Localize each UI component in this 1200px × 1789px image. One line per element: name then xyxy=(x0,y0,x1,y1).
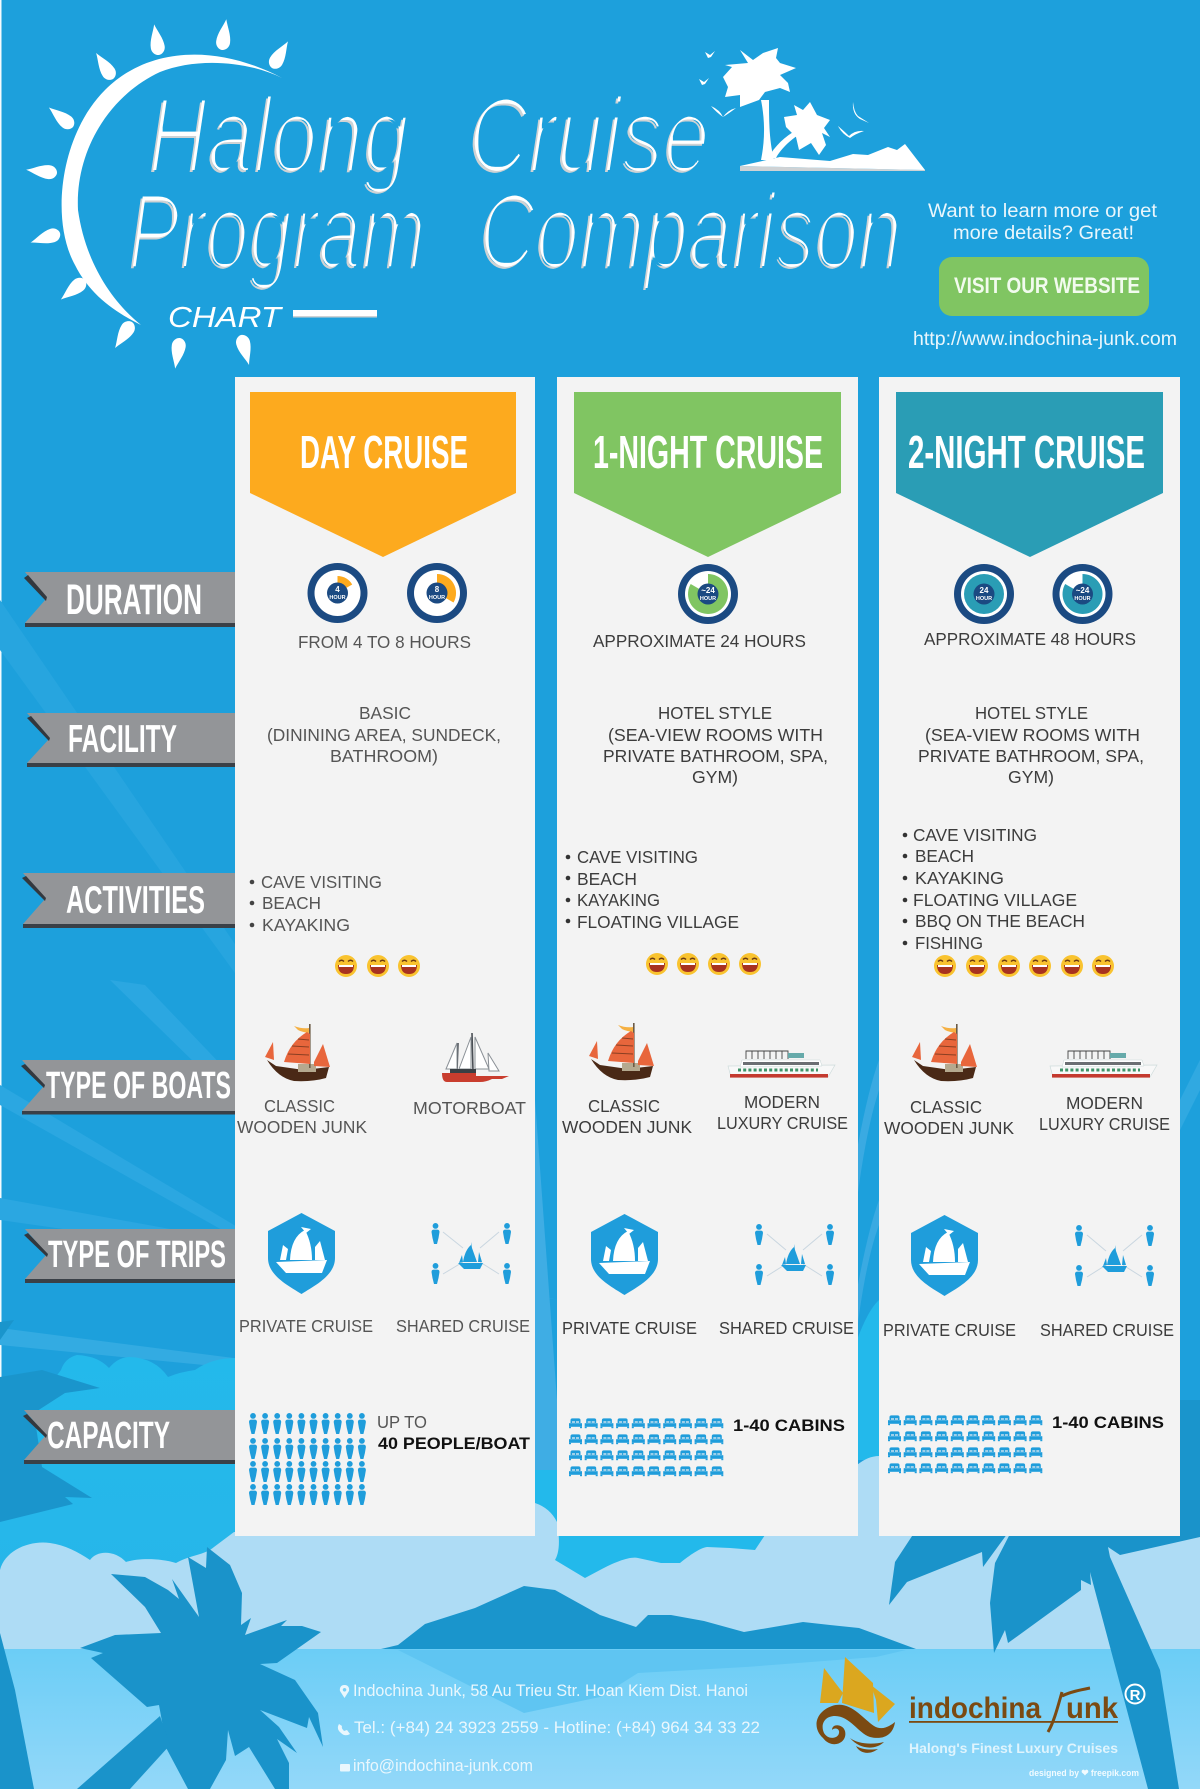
icon: wooden junk xyxy=(912,1024,977,1081)
title xyxy=(128,75,902,291)
text: activities: KAYAKING xyxy=(577,890,660,910)
row label: duration: DURATION xyxy=(66,576,202,624)
row label: type of boats xyxy=(21,1060,235,1114)
text: activities: BEACH xyxy=(262,893,321,913)
icon: private cruise shield xyxy=(911,1215,978,1296)
icon: luxury cruise xyxy=(1050,1051,1157,1078)
text: classic wooden junk xyxy=(562,1096,692,1137)
subtitle chart: CHART xyxy=(168,302,284,334)
text: classic wooden junk xyxy=(884,1097,1014,1138)
text: activities: BEACH xyxy=(915,846,974,866)
text: duration: APPROXIMATE 24 HOURS xyxy=(593,631,806,651)
icon: wooden junk xyxy=(265,1024,330,1081)
icon: 24 hour clock: HOUR xyxy=(976,596,992,602)
icon: approximately 24 hour clock: HOUR xyxy=(1074,596,1091,602)
icon: approximately 24 hour clock: ~24 xyxy=(1076,586,1090,595)
icon: 24 hour clock: 24 xyxy=(980,586,989,595)
icon: 4 hour clock: 4 xyxy=(335,585,340,594)
call to action text: Want to learn more or get xyxy=(928,201,1158,222)
text: facility: (SEA-VIEW ROOMS WITH xyxy=(608,725,823,745)
text: private cruise: PRIVATE CRUISE xyxy=(239,1316,373,1336)
text: classic wooden junk: WOODEN JUNK xyxy=(884,1118,1014,1138)
icon: registered mark: R xyxy=(1130,1687,1141,1704)
text: private cruise: PRIVATE CRUISE xyxy=(562,1318,697,1338)
icon: golden sails and brown wave xyxy=(817,1657,895,1753)
background mountains xyxy=(381,1586,916,1649)
text: modern luxury cruise: MODERN xyxy=(1066,1093,1143,1113)
text: activities: FLOATING VILLAGE xyxy=(577,912,739,932)
sun emblem xyxy=(25,18,294,370)
icon: people grid xyxy=(249,1413,366,1505)
icon: luxury cruise xyxy=(728,1051,835,1078)
text: activities: CAVE VISITING xyxy=(577,847,698,867)
icon: registered mark xyxy=(1126,1684,1144,1704)
text: shared cruise: SHARED CRUISE xyxy=(396,1316,530,1336)
footer: telephone: Tel.: (+84) 24 3923 2559 - Hotline: (+84) 964 34 33 22 xyxy=(354,1718,760,1737)
text: classic wooden junk: WOODEN JUNK xyxy=(562,1117,692,1137)
row label: type of boats: TYPE OF BOATS xyxy=(46,1065,231,1107)
text: facility: BASIC xyxy=(359,703,411,723)
icon: cabin grid xyxy=(569,1418,723,1476)
row label: activities xyxy=(22,873,235,928)
background left palm xyxy=(0,1547,323,1789)
icon: laughing faces xyxy=(646,953,761,975)
icon: cabin grid xyxy=(888,1415,1042,1473)
text: capacity: UP TO xyxy=(377,1412,427,1432)
logo: indochina junk xyxy=(817,1657,1144,1756)
text: motorboat: MOTORBOAT xyxy=(413,1098,526,1118)
icon: private cruise shield xyxy=(591,1214,658,1295)
text: activities xyxy=(566,847,739,932)
text: facility: HOTEL STYLE xyxy=(658,703,772,723)
text: classic wooden junk: CLASSIC xyxy=(588,1096,660,1116)
icon: laughing faces xyxy=(335,955,420,977)
subtitle chart xyxy=(168,302,377,334)
text: indochina junk wordmark xyxy=(909,1688,1118,1732)
text: classic wooden junk: CLASSIC xyxy=(910,1097,982,1117)
row label: type of trips xyxy=(24,1229,235,1283)
text: facility: (SEA-VIEW ROOMS WITH xyxy=(925,725,1140,745)
title: Program xyxy=(128,171,426,291)
text: classic wooden junk: CLASSIC xyxy=(264,1096,335,1116)
text: facility: BATHROOM) xyxy=(330,746,438,766)
text: indochina junk wordmark: indochina xyxy=(909,1692,1041,1725)
title: Comparison xyxy=(479,171,902,291)
text: facility: PRIVATE BATHROOM, SPA, xyxy=(918,746,1144,766)
text: duration: FROM 4 TO 8 HOURS xyxy=(298,632,471,652)
row label: facility: FACILITY xyxy=(68,718,177,761)
text: modern luxury cruise: MODERN xyxy=(744,1092,820,1112)
footer: address: Indochina Junk, 58 Au Trieu Str. Hoan Kiem Dist. Hanoi xyxy=(353,1681,748,1700)
icon: shared cruise xyxy=(1075,1225,1154,1286)
text: modern luxury cruise: LUXURY CRUISE xyxy=(1039,1114,1170,1134)
text: facility xyxy=(918,703,1144,787)
header: day cruise xyxy=(250,392,516,557)
icon: private cruise shield xyxy=(268,1213,335,1294)
text: capacity xyxy=(377,1412,531,1453)
call to action text: more details? Great! xyxy=(953,223,1134,244)
icon: shared cruise xyxy=(755,1224,834,1285)
text: activities: KAYAKING xyxy=(262,915,350,935)
text: indochina junk wordmark: unk xyxy=(1066,1692,1118,1725)
icon: 4 hour clock: HOUR xyxy=(329,595,346,601)
text: modern luxury cruise: LUXURY CRUISE xyxy=(717,1113,848,1133)
icon: shared cruise xyxy=(432,1223,511,1284)
text: classic wooden junk: WOODEN JUNK xyxy=(237,1117,367,1137)
text: activities: FISHING xyxy=(915,933,983,953)
credit: freepik: designed by ❤ freepik.com xyxy=(1029,1768,1139,1779)
icon: wooden junk xyxy=(589,1023,654,1080)
row label: capacity xyxy=(23,1410,235,1464)
text: classic wooden junk xyxy=(237,1096,367,1137)
call to action text xyxy=(928,201,1158,244)
background right palm xyxy=(889,1500,1200,1789)
text: shared cruise: SHARED CRUISE xyxy=(719,1318,854,1338)
icon: 24 hour clock xyxy=(678,564,738,624)
icon: 24 hour clock: HOUR xyxy=(700,596,716,602)
text: facility xyxy=(603,703,828,787)
icon: 24 hour clock xyxy=(954,564,1014,624)
text: facility: PRIVATE BATHROOM, SPA, xyxy=(603,746,828,766)
icon: motorboat xyxy=(442,1033,509,1082)
text: activities: CAVE VISITING xyxy=(261,872,382,892)
background clouds xyxy=(0,1456,1200,1650)
icon: 24 hour clock: ~24 xyxy=(701,586,715,595)
row label: duration xyxy=(24,572,235,627)
header: day cruise: DAY CRUISE xyxy=(300,426,468,478)
text: activities: KAYAKING xyxy=(915,868,1004,888)
button: visit our website: VISIT OUR WEBSITE xyxy=(954,273,1140,298)
text: shared cruise: SHARED CRUISE xyxy=(1040,1320,1174,1340)
text: modern luxury cruise xyxy=(717,1092,848,1133)
text: activities xyxy=(250,872,382,935)
text: facility: HOTEL STYLE xyxy=(975,703,1088,723)
text: activities: BBQ ON THE BEACH xyxy=(915,911,1085,931)
text: facility: (DININING AREA, SUNDECK, xyxy=(267,725,501,745)
text: facility: GYM) xyxy=(1008,767,1054,787)
text: capacity: 1-40 CABINS xyxy=(1052,1413,1164,1432)
footer: email: info@indochina-junk.com xyxy=(353,1756,533,1775)
text: facility xyxy=(267,703,501,766)
website url: http://www.indochina-junk.com xyxy=(913,329,1177,350)
text: tagline: Halong's Finest Luxury Cruises xyxy=(909,1740,1118,1756)
title: Halong xyxy=(148,75,409,195)
icon: palm island with birds xyxy=(699,48,925,171)
icon: 8 hour clock: 8 xyxy=(435,585,440,594)
text: capacity: 1-40 CABINS xyxy=(733,1416,845,1435)
panel: day cruise xyxy=(235,377,535,1536)
panel: 1-night cruise xyxy=(557,377,858,1536)
text: modern luxury cruise xyxy=(1039,1093,1170,1134)
text: activities: CAVE VISITING xyxy=(913,825,1037,845)
text: facility: GYM) xyxy=(692,767,738,787)
background sea xyxy=(0,1649,1200,1789)
icon: laughing faces xyxy=(934,955,1114,977)
text: duration: APPROXIMATE 48 HOURS xyxy=(924,629,1136,649)
button: visit our website xyxy=(939,257,1149,316)
row label: activities: ACTIVITIES xyxy=(66,879,205,922)
row label: facility xyxy=(27,713,235,767)
icon: 8 hour clock: HOUR xyxy=(429,595,445,601)
row label: capacity: CAPACITY xyxy=(47,1415,170,1457)
header: 1-night cruise: 1-NIGHT CRUISE xyxy=(593,426,823,478)
text: activities: FLOATING VILLAGE xyxy=(913,890,1077,910)
text: capacity: 40 PEOPLE/BOAT xyxy=(378,1434,531,1453)
icon: 8 hour clock xyxy=(407,563,467,623)
text: private cruise: PRIVATE CRUISE xyxy=(883,1320,1016,1340)
icon: approximately 24 hour clock xyxy=(1052,564,1112,624)
row label: type of trips: TYPE OF TRIPS xyxy=(48,1234,226,1276)
text: activities xyxy=(903,825,1085,953)
header: 1-night cruise xyxy=(574,392,841,557)
header: 2-night cruise xyxy=(896,392,1163,557)
title: Cruise xyxy=(468,75,710,195)
text: activities: BEACH xyxy=(577,869,637,889)
icon: 4 hour clock xyxy=(308,563,368,623)
panel: 2-night cruise xyxy=(879,377,1180,1536)
